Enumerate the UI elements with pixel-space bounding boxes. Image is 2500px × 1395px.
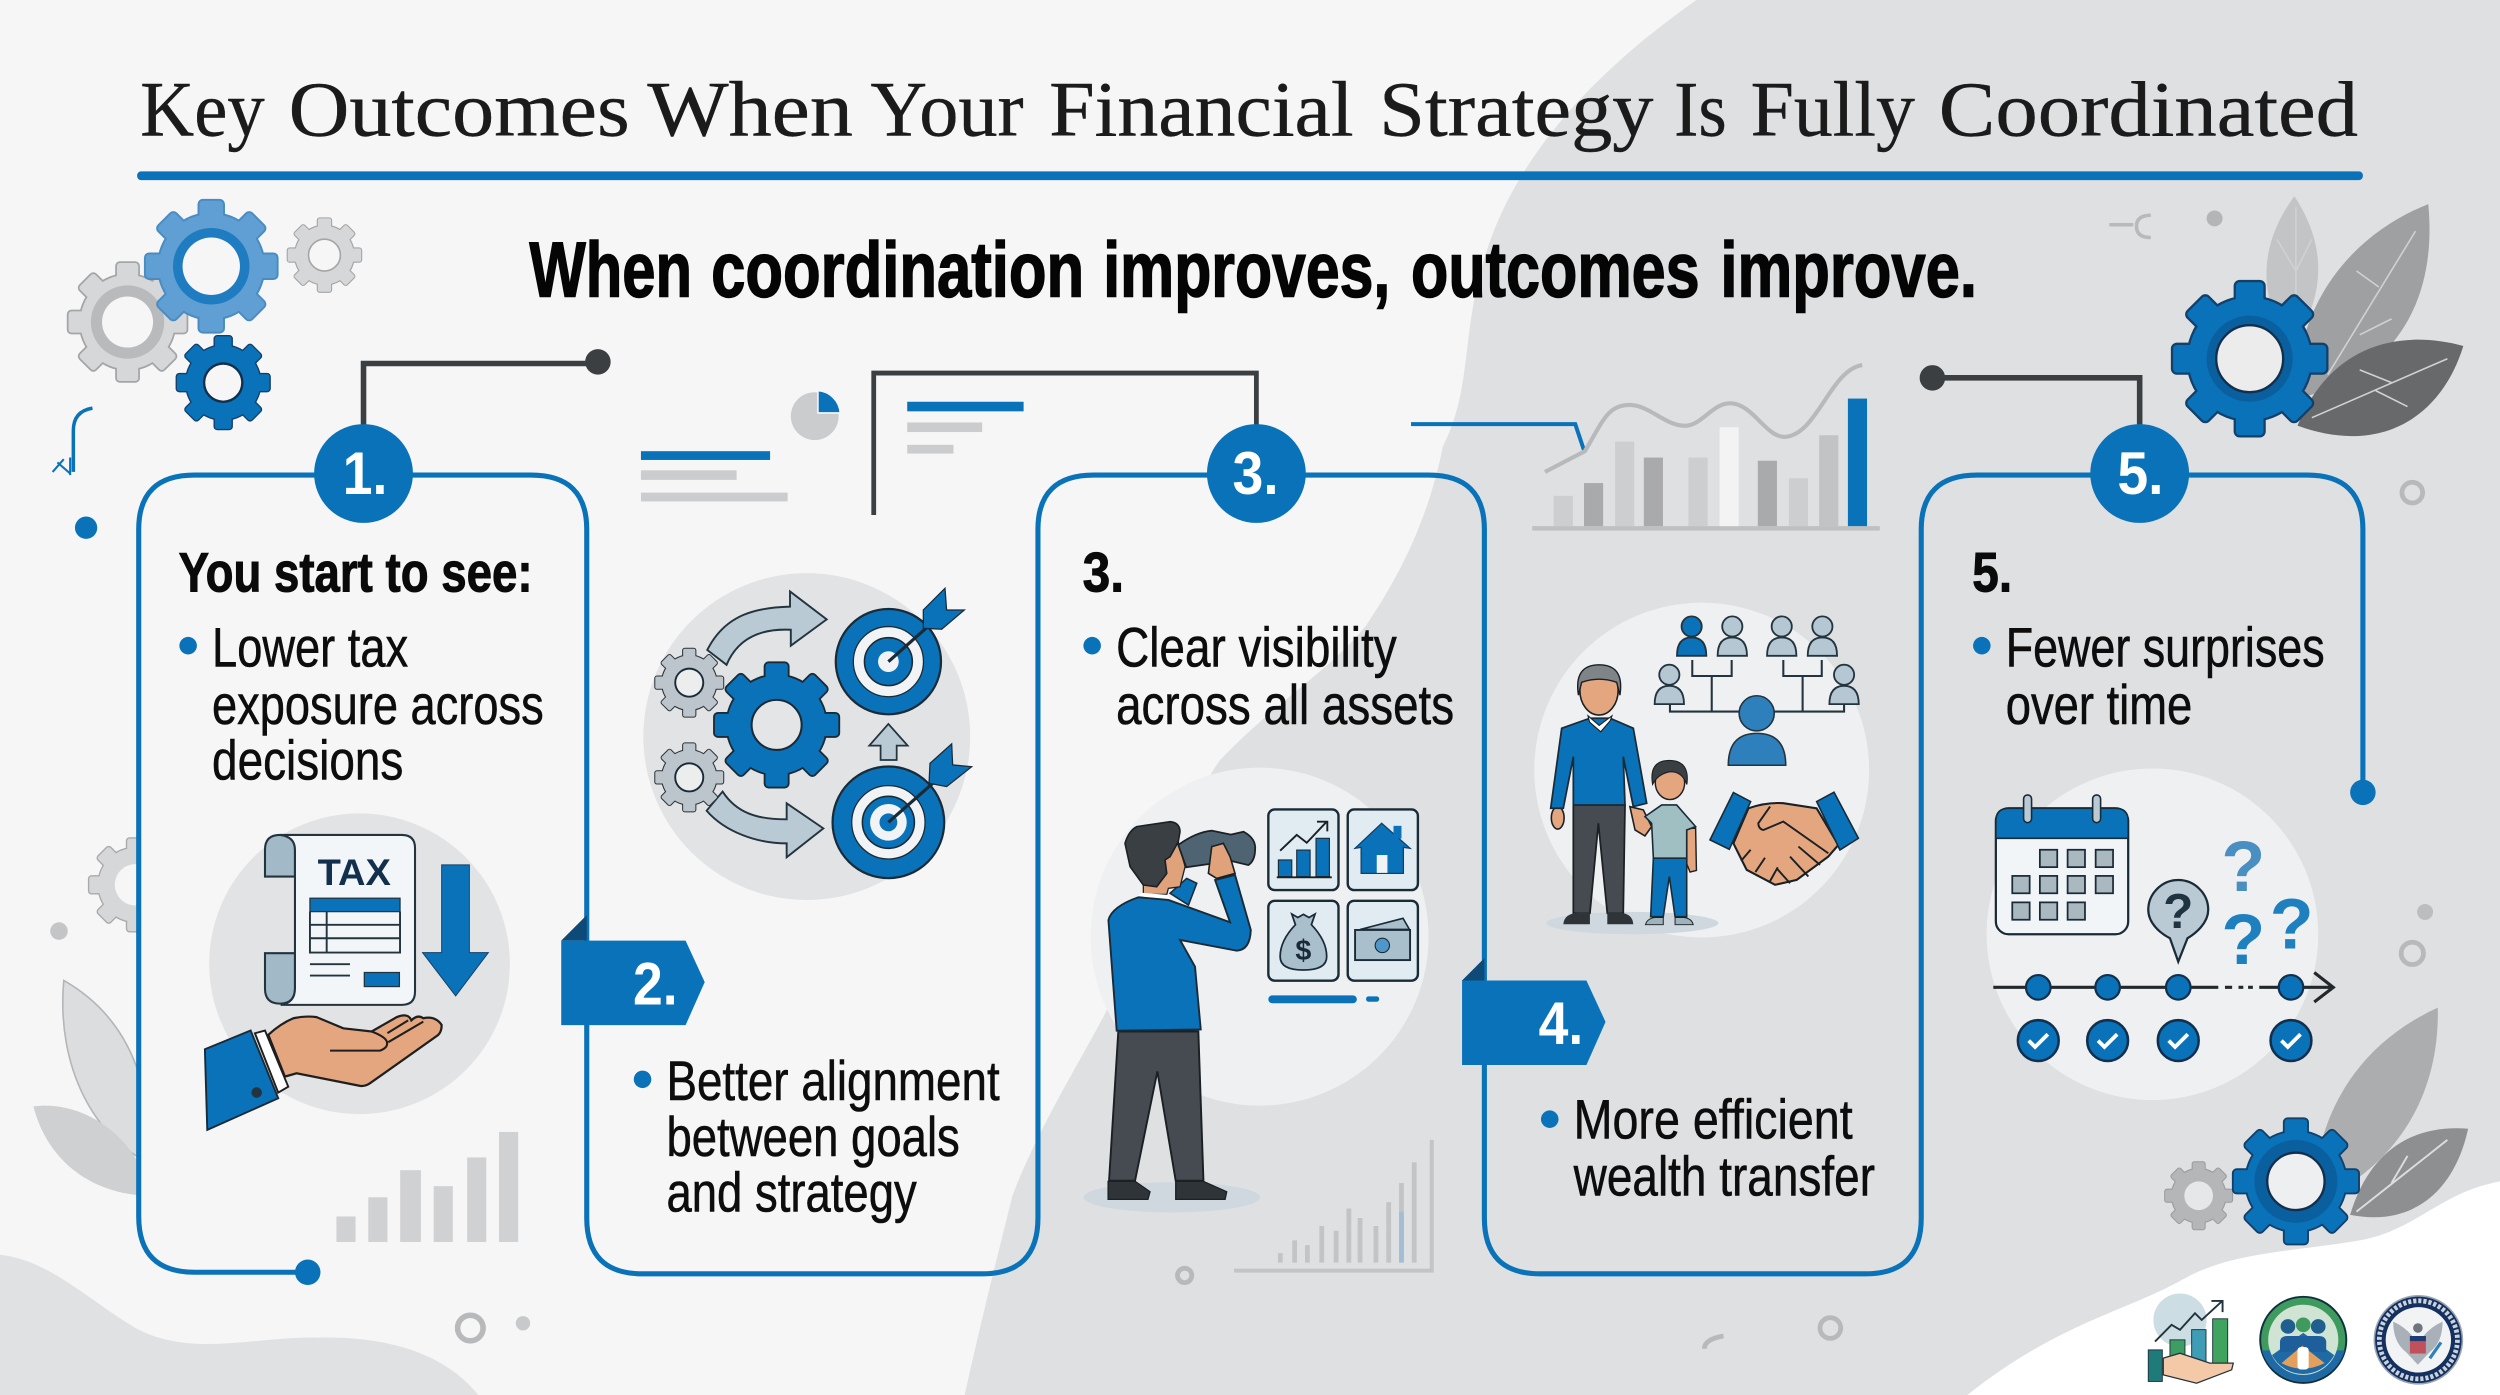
subtitle: improves, [1103, 226, 1390, 314]
bullet text 1: exposure across [212, 673, 544, 736]
bullet text 5: Fewer surprises [2006, 615, 2325, 678]
number ribbon 4 [1462, 958, 1606, 1065]
title: When [647, 66, 853, 153]
number badge 1 [314, 424, 413, 523]
bullet text 2: Better alignment [666, 1049, 1000, 1112]
logo: community badge [2260, 1297, 2346, 1383]
bullet text 5 [1973, 615, 2325, 736]
title rule [137, 171, 2363, 180]
icon: calendar, questions and timeline [1987, 768, 2333, 1100]
icon: calendar, questions and timeline: ? [2163, 884, 2193, 939]
number ribbon 2 [561, 915, 705, 1025]
panel 2: goals alignment [561, 573, 1000, 1224]
logo: seal [2374, 1296, 2462, 1384]
icon: calendar, questions and timeline: ? [2270, 884, 2314, 964]
panel 5: fewer surprises [1972, 424, 2376, 1100]
icon: calendar, questions and timeline: ? [2221, 827, 2265, 907]
icon: top-right leaves and gear [2173, 196, 2463, 436]
number badge 3: 3. [1232, 439, 1279, 507]
title: Coordinated [1939, 66, 2358, 153]
number ribbon 2: 2. [633, 949, 678, 1017]
subtitle: coordination [711, 226, 1084, 314]
icon: family, tree and handshake [1534, 603, 1869, 937]
icon: person with binoculars and asset tiles: $ [1295, 935, 1311, 967]
icon: bottom-right leaves and gears [2165, 1008, 2468, 1244]
bullet text 1: decisions [212, 729, 403, 792]
number badge 5: 5. [2117, 439, 2164, 507]
subtitle: When [529, 226, 692, 314]
icon: calendar, questions and timeline: ? [2221, 900, 2265, 980]
title: Fully [1751, 66, 1915, 153]
chart: growth bars with trend line [1532, 365, 1880, 531]
subtitle [529, 226, 1977, 314]
decorative dots and rings [50, 210, 2433, 1349]
icon: gears, arrows and targets [643, 573, 972, 900]
icon: tax document and hand [205, 813, 510, 1130]
line dot [295, 1259, 320, 1285]
title: Your [871, 66, 1024, 153]
bullet text 1: Lower tax [212, 615, 408, 678]
panel 4: wealth transfer [1462, 603, 1875, 1208]
line dot [2350, 780, 2376, 805]
continuous card outline [139, 475, 2363, 1274]
bullet text 4: More efficient [1574, 1087, 1853, 1150]
title: Outcomes [289, 66, 630, 153]
chart: small rising bars [336, 1132, 518, 1242]
icon: top-left gears [69, 201, 361, 429]
chart: small thin bars [1234, 1140, 1432, 1271]
number badge 5 [2090, 424, 2189, 523]
title: Strategy [1379, 66, 1653, 153]
decorative text lines and pie [641, 391, 1024, 501]
bullet text 2: and strategy [666, 1161, 917, 1224]
title: Is [1674, 66, 1727, 153]
bullet text 2: between goals [666, 1105, 960, 1168]
subtitle: outcomes [1411, 226, 1700, 314]
connector lines [364, 349, 2140, 515]
bullet text 4 [1541, 1087, 1875, 1208]
logo: growth hand [2148, 1293, 2233, 1383]
bullet text 2 [634, 1049, 1000, 1224]
panel 3: asset visibility [1083, 424, 1454, 1271]
number badge 3 [1207, 424, 1306, 523]
heading 3: 3. [1083, 540, 1124, 603]
panel 1: lower tax exposure [179, 424, 544, 1285]
number ribbon 4: 4. [1539, 989, 1583, 1057]
bullet text 4: wealth transfer [1573, 1145, 1875, 1208]
number badge 1: 1. [343, 439, 387, 507]
title: Key [140, 66, 265, 153]
heading 5: 5. [1972, 540, 2012, 603]
bullet text 1 [179, 615, 544, 792]
heading 1: You start to see: [179, 540, 533, 603]
icon: person with binoculars and asset tiles [1084, 768, 1429, 1212]
bullet text 3 [1083, 615, 1454, 736]
icon: left partial gear and leaves [34, 837, 136, 1195]
bullet text 3: across all assets [1116, 673, 1454, 736]
title [140, 66, 2358, 153]
logos [2148, 1293, 2462, 1384]
title: Financial [1049, 66, 1354, 153]
subtitle: improve. [1720, 226, 1977, 314]
bullet text 5: over time [2006, 673, 2192, 736]
bullet text 3: Clear visibility [1116, 615, 1397, 678]
icon: tax document and hand: TAX [318, 851, 391, 893]
